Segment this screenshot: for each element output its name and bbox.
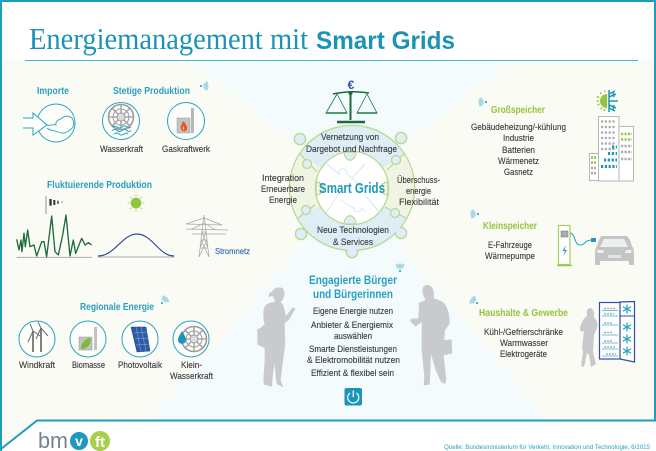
panel: Engagierte Bürger: Anbieter & Energiemix bbox=[311, 320, 393, 331]
panel: Regionale Energie: Biomasse bbox=[72, 360, 105, 371]
panel: Fluktuierende Produktion: Fluktuierende Produktion bbox=[47, 179, 152, 191]
panel: Fluktuierende Produktion bbox=[17, 179, 250, 257]
panel: Regionale Energie: Photovoltaik bbox=[118, 360, 162, 371]
icon: power pylon bbox=[186, 215, 228, 257]
panel: Engagierte Bürger: Effizient & flexibel sein bbox=[311, 368, 394, 379]
panel: Großspeicher: Batterien bbox=[502, 145, 535, 156]
panel: Regionale Energie: Klein- bbox=[181, 360, 202, 371]
icon: Klein-Wasserkraft bbox=[173, 321, 209, 357]
logo: bmvit: ft bbox=[95, 434, 105, 451]
icon: sun and snowflake bbox=[596, 90, 618, 112]
centre disc bbox=[316, 152, 388, 224]
logo: bmvit: v bbox=[75, 433, 83, 449]
panel: Haushalte & Gewerbe: Warmwasser bbox=[500, 338, 548, 349]
panel: Kleinspeicher: E-Fahrzeuge bbox=[488, 240, 532, 251]
centre puzzle lines bbox=[326, 163, 379, 213]
icon: fridge bbox=[600, 302, 634, 362]
label: right piece: Überschuss- bbox=[397, 175, 440, 186]
icon: woman silhouette bbox=[257, 287, 295, 387]
panel: Fluktuierende Produktion: Stromnetz bbox=[215, 246, 250, 256]
panel: Stetige Produktion: Stetige Produktion bbox=[113, 85, 190, 97]
label: Smart Grids: Smart Grids bbox=[319, 180, 385, 197]
panel: Regionale Energie: Wasserkraft bbox=[170, 371, 213, 382]
label: left piece bbox=[261, 173, 305, 206]
icon: balance scale with euro: € bbox=[348, 78, 355, 92]
ring dividers bbox=[298, 154, 406, 218]
panel: Engagierte Bürger: Eigene Energie nutzen bbox=[313, 306, 393, 317]
label: left piece: Energie bbox=[269, 195, 297, 206]
panel: Engagierte Bürger: auswählen bbox=[334, 331, 372, 342]
panel: Regionale Energie: Windkraft bbox=[19, 360, 55, 371]
title: Smart Grids bbox=[316, 27, 455, 55]
chart: wind power curve bbox=[17, 215, 92, 257]
icon: Wasserkraft bbox=[102, 102, 140, 140]
panel: Stetige Produktion: Wasserkraft bbox=[100, 144, 143, 155]
panel: Engagierte Bürger: und Bürgerinnen bbox=[313, 287, 393, 301]
icon: wifi regional bbox=[158, 294, 171, 307]
panel: Großspeicher: Industrie bbox=[503, 133, 534, 144]
panel: Engagierte Bürger bbox=[257, 264, 452, 406]
icon: wifi top bbox=[200, 81, 208, 91]
panel: Haushalte & Gewerbe: Elektrogeräte bbox=[500, 349, 547, 360]
icon: import arrow into Austria bbox=[23, 104, 75, 142]
outline of ring and knobs bbox=[290, 126, 414, 257]
panel: Regionale Energie bbox=[19, 294, 213, 382]
label: bottom piece: & Services bbox=[333, 237, 373, 248]
title: Energiemanagement mit bbox=[29, 21, 308, 56]
panel: Großspeicher bbox=[471, 90, 634, 181]
label: left piece: Integration bbox=[262, 173, 304, 184]
label: right piece bbox=[397, 175, 440, 208]
panel: Engagierte Bürger: Smarte Dienstleistungen bbox=[309, 344, 397, 355]
panel: Engagierte Bürger: & Elektromobilität nutzen bbox=[307, 355, 400, 366]
icon: Gaskraftwerk bbox=[168, 102, 204, 140]
icon: car bbox=[595, 236, 634, 265]
icon: wifi small storage bbox=[470, 209, 479, 219]
icon: wifi citizens bbox=[395, 264, 405, 272]
icon: Photovoltaik bbox=[122, 321, 158, 357]
panel: Großspeicher: Wärmenetz bbox=[498, 156, 539, 167]
diagram: Smart Grids puzzle ring bbox=[261, 126, 440, 257]
label: left piece: Erneuerbare bbox=[261, 184, 305, 195]
icon: sun bbox=[128, 194, 144, 212]
label: bottom piece: Neue Technologien bbox=[317, 225, 389, 236]
panel: Stetige Produktion bbox=[100, 81, 210, 155]
icon: Biomasse bbox=[70, 321, 106, 357]
label: right piece: Flexibilität bbox=[399, 197, 439, 208]
icon: man silhouette bbox=[410, 285, 452, 385]
panel: Großspeicher: Großspeicher bbox=[491, 104, 545, 116]
icon: wifi households bbox=[468, 295, 481, 308]
panel: Großspeicher: Gebäudeheizung/-kühlung bbox=[471, 122, 566, 133]
ring pieces bbox=[290, 126, 414, 250]
source line: Quelle: Bundesministerium für Verkehr, Innovation und Technologie, 6/2015 bbox=[444, 444, 650, 451]
panel: Haushalte & Gewerbe: Kühl-/Gefrierschränke bbox=[484, 327, 563, 338]
panel: Haushalte & Gewerbe bbox=[468, 295, 634, 367]
panel: Kleinspeicher bbox=[470, 209, 634, 266]
label: top piece: Dargebot und Nachfrage bbox=[306, 144, 397, 155]
icon: balance scale with euro bbox=[326, 78, 377, 122]
chart: solar bell curve bbox=[98, 234, 174, 257]
panel: Haushalte & Gewerbe: Haushalte & Gewerbe bbox=[479, 307, 568, 319]
panel: Stetige Produktion: Gaskraftwerk bbox=[162, 144, 210, 155]
panel: Kleinspeicher: Wärmepumpe bbox=[485, 251, 535, 262]
label: top piece: Vernetzung von bbox=[321, 132, 379, 143]
icon: windsock bbox=[46, 196, 63, 214]
label: right piece: energie bbox=[406, 186, 431, 197]
icon: wifi storage bbox=[478, 97, 487, 107]
panel: Kleinspeicher: Kleinspeicher bbox=[483, 220, 537, 232]
icon: woman on phone bbox=[580, 308, 598, 367]
panel: Importe: Importe bbox=[37, 85, 69, 97]
label: bottom piece bbox=[317, 225, 389, 248]
logo: bmvit bbox=[38, 428, 110, 451]
panel: Importe bbox=[23, 85, 75, 142]
icon: power button bbox=[344, 388, 362, 406]
panel: Großspeicher: Gasnetz bbox=[504, 167, 533, 178]
icon: buildings bbox=[590, 116, 634, 181]
icon: Windkraft bbox=[19, 321, 55, 357]
label: top piece bbox=[306, 132, 397, 155]
panel: Engagierte Bürger: Engagierte Bürger bbox=[309, 273, 397, 287]
icon: charging station bbox=[557, 226, 596, 266]
panel: Regionale Energie: Regionale Energie bbox=[80, 301, 154, 313]
